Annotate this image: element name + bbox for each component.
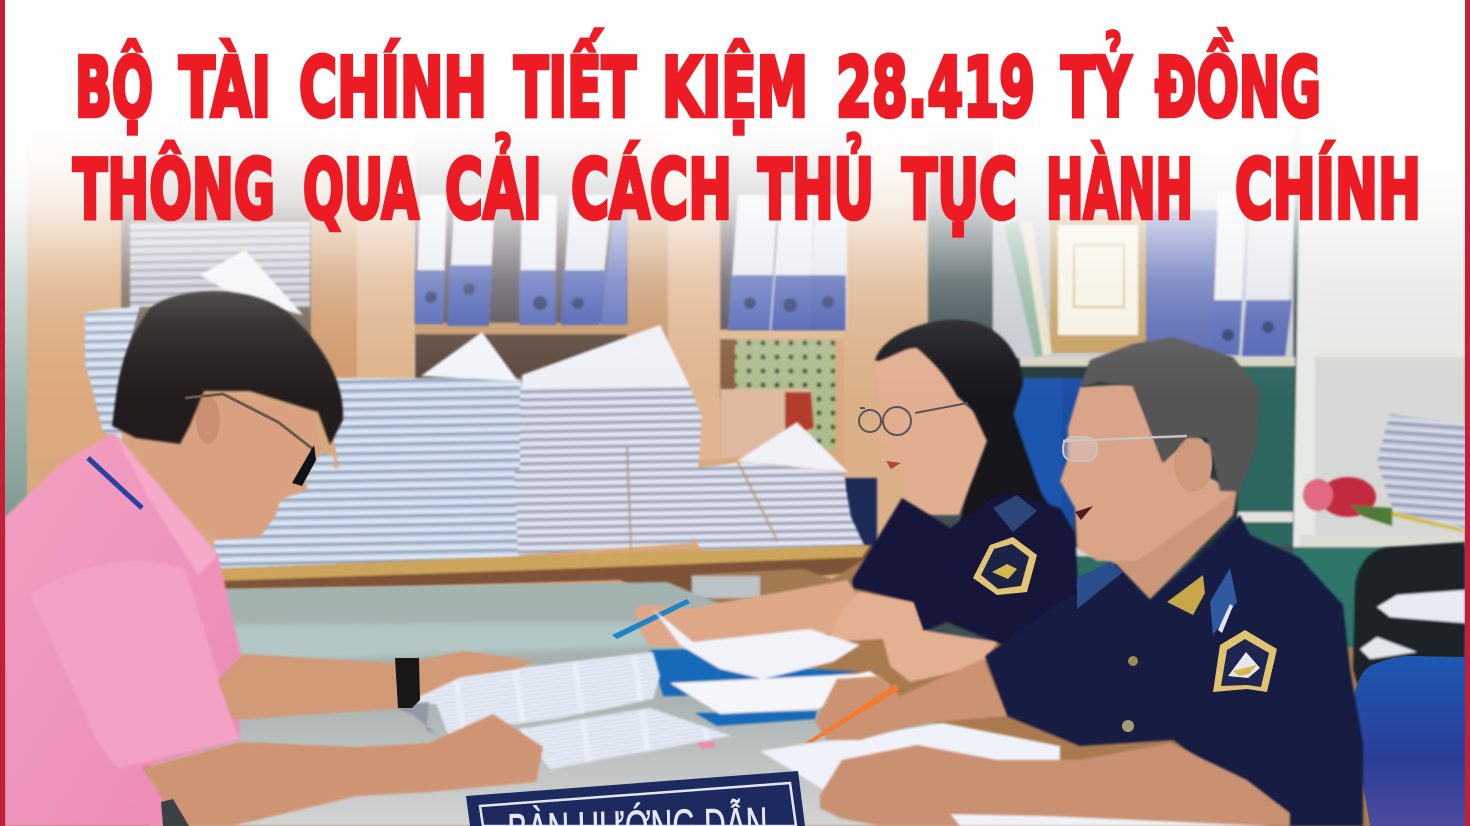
title line 2: THỦ [758,133,874,238]
pegboard and gift box on the shelf [720,340,877,554]
title line 1: KIỆM [662,39,808,136]
glasses [1063,436,1187,441]
mouth [1075,506,1093,520]
shoulder epaulette [993,495,1037,532]
ear [196,396,220,444]
neck and face [125,391,322,540]
face [1060,384,1237,561]
orange pen [805,684,899,743]
left arm and bracelet hand [827,592,997,682]
wooden desk shelf [214,545,900,659]
title line 2: CÁCH [571,141,732,238]
black office chair [1353,542,1465,692]
certificate frame and books [1004,215,1146,357]
right red border [1465,0,1470,826]
writing hand and forearm [815,659,1007,740]
dragon fruit [1303,477,1392,526]
title line 1 [75,29,1321,136]
white fade over top of the photo [0,0,1470,400]
paper stacks [85,222,1465,570]
hair [112,291,343,445]
navy uniform [985,515,1363,826]
lower arm and hand [820,743,1290,826]
title line 2: QUA [303,143,419,238]
title line 2: HÀNH [1046,141,1193,238]
papers under the arm [950,814,1270,826]
hair [875,320,1070,619]
open book on desk [389,652,732,769]
title line 1: TIẾT [514,29,636,136]
desk surface [150,582,1270,826]
title line 2: THÔNG [73,141,275,238]
shoulder badge [973,537,1037,595]
wooden cabinet [27,0,930,590]
blue binders [415,190,1295,546]
buttons [1128,656,1138,666]
right arm and hand holding paper [635,580,923,647]
title line 2 [73,133,1421,238]
title line 1: TỶ [1061,31,1132,136]
lower forearm and hand [143,714,543,826]
desk sign: Bàn hướng dẫn [466,771,805,826]
ear [1174,436,1212,492]
face [875,348,987,515]
title [73,29,1421,238]
neck [1097,491,1237,599]
wall at far left [5,0,30,530]
blue pen [612,599,690,639]
glasses [860,403,968,413]
title line 1: CHÍNH [299,40,487,136]
title line 1: ĐỒNG [1155,29,1321,136]
mouth [886,461,901,469]
person: woman officer [612,320,1080,682]
chair detail [161,799,189,826]
documents on desk [650,609,1060,792]
shoulder badge [1213,630,1277,692]
right-hand shelves [928,0,1465,647]
reflection on desk [228,623,723,661]
title line 1: BỘ [75,39,153,136]
wristwatch [395,658,420,708]
gold collar insignia [1167,575,1205,615]
upper forearm and hand [218,651,536,719]
title line 1: 28.419 [836,41,1035,136]
blue chair back [1353,656,1465,826]
title line 2: CẢI [445,133,542,238]
title line 1: TÀI [179,39,271,136]
navy uniform [852,493,1080,648]
person: senior male officer [805,337,1363,826]
person: man in pink shirt [5,291,543,826]
pink shirt [5,433,243,826]
shoulder epaulettes [1077,562,1123,609]
lanyard [88,458,142,508]
glasses [185,394,314,450]
gray hair [1080,337,1260,491]
left red border [0,0,5,826]
title line 2: TỤC [902,143,1017,238]
